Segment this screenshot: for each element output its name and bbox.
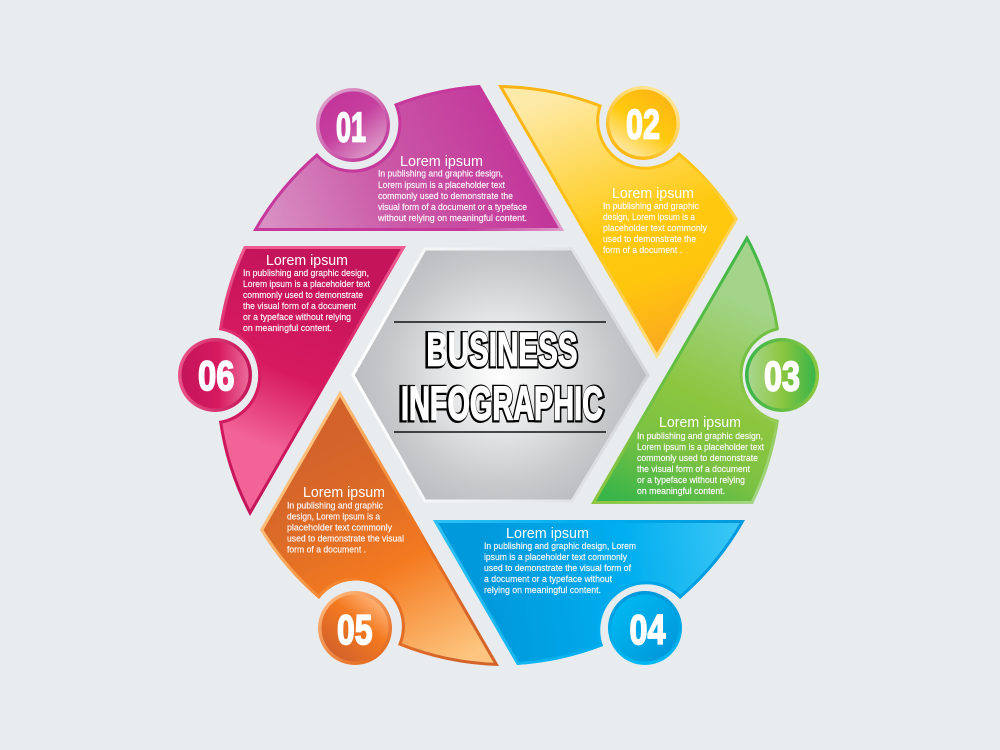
panel: segment 02 yellow [498,85,738,359]
body text 06 [243,268,370,334]
segment shape 04 [433,520,745,665]
body text 06: Lorem ipsum is a placeholder text [243,279,370,290]
segment shape 05 [260,391,499,666]
heading 01: Lorem ipsum [400,153,483,170]
body text 02: placeholder text commonly [603,223,707,234]
body text 03: the visual form of a document [637,464,750,475]
title: BUSINESS INFOGRAPHIC [394,322,606,432]
body text 04: In publishing and graphic design, Lorem [484,541,636,552]
body text 01: In publishing and graphic design, [378,168,503,180]
hexagon shape [353,249,648,501]
panel: segment 05 orange [260,391,499,666]
body text 05 [287,500,404,556]
title: BUSINESS INFOGRAPHIC: BUSINESS [426,322,578,376]
heading 06: Lorem ipsum [266,252,348,269]
number badge 04 [608,591,682,665]
number badge 05 [318,591,392,665]
body text 02: used to demonstrate the [603,234,696,245]
panel: segment 04 blue [433,520,745,665]
title: BUSINESS INFOGRAPHIC: BUSINESS [425,323,578,376]
body text 03: on meaningful content. [637,486,725,497]
body text 06: on meaningful content. [243,323,332,334]
segment shape 03 [591,235,779,504]
body text 01: without relying on meaningful content. [377,213,527,224]
heading 05: Lorem ipsum [303,484,385,501]
heading 04: Lorem ipsum [506,525,589,542]
body text 03: In publishing and graphic design, [637,431,763,442]
body text 02: design, Lorem ipsum is a [603,212,696,223]
body text 05: In publishing and graphic [287,500,383,512]
number badge 06 [178,338,252,412]
body text 05: used to demonstrate the visual [287,534,404,544]
body text 01: commonly used to demonstrate the [378,191,513,202]
number badge 02 [606,86,680,160]
body text 05: placeholder text commonly [287,522,392,534]
body text 04: ipsum is a placeholder text commonly [484,552,627,563]
body text 06: or a typeface without relying [243,312,351,323]
panel: center hexagon [353,249,648,501]
body text 02: form of a document . [603,245,682,256]
body text 04 [484,541,636,596]
body text 05: design, Lorem ipsum is a [287,512,381,522]
body text 04: relying on meaningful content. [484,585,601,596]
panel: segment 03 green [591,235,819,504]
number badge 01 [316,88,390,162]
segment shape 02 [498,85,738,359]
panel: segment 06 crimson [178,246,406,516]
body text 05: form of a document . [287,544,366,556]
body text 02 [603,201,707,256]
number badge 06: 06 [198,352,234,399]
number badge 02: 02 [626,100,660,148]
title: BUSINESS INFOGRAPHIC: INFOGRAPHIC [399,377,604,430]
body text 03: Lorem ipsum is a placeholder text [637,442,764,453]
number badge 05: 05 [337,606,372,653]
number badge 03: 03 [764,352,800,400]
number badge 04: 04 [630,606,666,653]
body text 01: Lorem ipsum is a placeholder text [378,180,505,191]
heading 03: Lorem ipsum [659,414,741,431]
body text 02: In publishing and graphic [603,201,699,212]
segment shape 01 [253,85,564,231]
body text 06: In publishing and graphic design, [243,268,369,279]
number badge 03 [745,338,819,412]
body text 06: the visual form of a document [243,301,356,312]
body text 01 [377,168,527,224]
title: BUSINESS INFOGRAPHIC: INFOGRAPHIC [401,376,603,430]
segment shape 06 [219,246,406,516]
panel: segment 01 magenta [253,85,564,231]
body text 03: commonly used to demonstrate [637,453,758,464]
body text 06: commonly used to demonstrate [243,290,363,301]
body text 03: or a typeface without relying [637,475,745,486]
body text 04: a document or a typeface without [484,574,612,585]
heading 02: Lorem ipsum [612,185,694,202]
number badge 01: 01 [336,104,366,150]
body text 04: used to demonstrate the visual form of [484,563,631,574]
body text 01: visual form of a document or a typeface [378,202,527,213]
body text 03 [637,431,764,497]
